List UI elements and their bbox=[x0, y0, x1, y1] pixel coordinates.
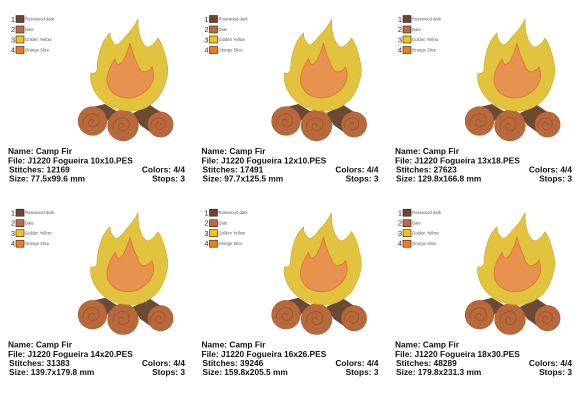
color legend 16x26: 1 bbox=[204, 209, 208, 218]
color legend 16x26: 4 bbox=[204, 239, 208, 248]
stitch details 13x18: Stitches: 27623 bbox=[396, 164, 457, 174]
stitch details 10x10 bbox=[8, 146, 185, 184]
color legend 18x30: Rosewood dark bbox=[412, 210, 442, 215]
stitch details 12x10: Name: Camp Fir bbox=[202, 146, 266, 156]
color legend 12x10: Orange Slice bbox=[218, 48, 243, 52]
stitch details 16x26: Name: Camp Fir bbox=[202, 340, 266, 350]
stitch details 10x10: File: J1220 Fogueira 10x10.PES bbox=[8, 155, 133, 165]
stitch details 14x20: Stops: 3 bbox=[152, 367, 185, 377]
color legend 13x18: Rosewood dark bbox=[412, 16, 442, 22]
stitch details 16x26: Stops: 3 bbox=[346, 367, 379, 377]
stitch details 18x30: Stitches: 48289 bbox=[396, 358, 457, 368]
stitch details 14x20: Name: Camp Fir bbox=[8, 340, 73, 350]
stitch details 14x20 bbox=[8, 340, 185, 377]
stitch details 18x30: Name: Camp Fir bbox=[395, 340, 460, 350]
color legend 10x10: 4 bbox=[11, 46, 15, 54]
color legend 18x30: 1 bbox=[398, 209, 402, 218]
color legend 14x20: 2 bbox=[11, 219, 15, 228]
color legend 18x30 bbox=[398, 209, 442, 248]
color legend 10x10: Orange Slice bbox=[25, 48, 50, 52]
stitch details 10x10: Size: 77.5x99.6 mm bbox=[9, 174, 85, 184]
stitch details 18x30 bbox=[395, 340, 572, 377]
stitch details 12x10 bbox=[202, 146, 379, 184]
color legend 14x20 bbox=[11, 209, 55, 248]
color legend 14x20: Rosewood dark bbox=[25, 210, 55, 215]
panel: 16x26 design bbox=[202, 209, 379, 377]
color legend 10x10: 2 bbox=[11, 25, 15, 34]
stitch details 14x20: Size: 139.7x179.8 mm bbox=[9, 367, 94, 377]
color legend 16x26: Orange Slice bbox=[218, 241, 243, 246]
stitch details 10x10: Stitches: 12169 bbox=[9, 164, 70, 174]
color legend 14x20: 1 bbox=[11, 209, 15, 218]
icon: campfire embroidery 10x10 bbox=[78, 19, 173, 141]
color legend 12x10: 1 bbox=[204, 15, 208, 24]
color legend 13x18: Orange Slice bbox=[412, 48, 437, 52]
color legend 18x30: Golden Yellow bbox=[412, 231, 440, 236]
color legend 18x30: Orange Slice bbox=[412, 241, 437, 246]
color legend 14x20: 3 bbox=[11, 229, 15, 238]
color legend 12x10: Rosewood dark bbox=[218, 16, 249, 22]
panel: 14x20 design bbox=[8, 209, 185, 377]
color legend 13x18: 2 bbox=[398, 25, 402, 34]
stitch details 13x18: Stops: 3 bbox=[539, 174, 572, 184]
color legend 16x26: Golden Yellow bbox=[218, 231, 246, 236]
stitch details 12x10: Stops: 3 bbox=[346, 174, 379, 184]
color legend 14x20: Date bbox=[25, 221, 35, 226]
color legend 10x10: Golden Yellow bbox=[25, 37, 53, 42]
color legend 12x10: 2 bbox=[204, 25, 208, 34]
stitch details 14x20: Stitches: 31383 bbox=[9, 358, 70, 368]
stitch details 10x10: Name: Camp Fir bbox=[8, 146, 73, 156]
color legend 13x18: 1 bbox=[398, 15, 402, 24]
stitch details 18x30: Colors: 4/4 bbox=[529, 358, 572, 368]
color legend 12x10: 4 bbox=[204, 46, 208, 54]
color legend 13x18: 3 bbox=[398, 36, 402, 44]
stitch details 13x18: File: J1220 Fogueira 13x18.PES bbox=[395, 155, 520, 165]
stitch details 13x18: Colors: 4/4 bbox=[529, 164, 572, 174]
stitch details 12x10: Colors: 4/4 bbox=[335, 164, 379, 174]
stitch details 14x20: File: J1220 Fogueira 14x20.PES bbox=[8, 349, 133, 359]
stitch details 12x10: File: J1220 Fogueira 12x10.PES bbox=[202, 155, 327, 165]
color legend 12x10: 3 bbox=[204, 36, 208, 44]
color legend 10x10: 3 bbox=[11, 36, 15, 44]
color legend 10x10 bbox=[11, 15, 55, 54]
stitch details 16x26 bbox=[202, 340, 379, 377]
color legend 18x30: 2 bbox=[398, 219, 402, 228]
icon: campfire embroidery 16x26 bbox=[272, 213, 367, 334]
stitch details 13x18: Size: 129.8x166.8 mm bbox=[396, 174, 481, 184]
stitch details 16x26: Size: 159.8x205.5 mm bbox=[202, 367, 288, 377]
color legend 14x20: Golden Yellow bbox=[25, 231, 53, 236]
color legend 10x10: 1 bbox=[11, 15, 15, 24]
stitch details 18x30: Stops: 3 bbox=[539, 367, 572, 377]
panel: 10x10 design bbox=[8, 15, 185, 184]
stitch details 16x26: File: J1220 Fogueira 16x26.PES bbox=[202, 349, 327, 359]
stitch details 12x10: Size: 97.7x125.5 mm bbox=[202, 174, 283, 184]
color legend 16x26 bbox=[204, 209, 249, 248]
color legend 13x18: Date bbox=[412, 27, 422, 32]
color legend 18x30: 3 bbox=[398, 229, 402, 238]
color legend 13x18: Golden Yellow bbox=[412, 37, 440, 42]
icon: campfire embroidery 13x18 bbox=[465, 19, 560, 141]
stitch details 18x30: File: J1220 Fogueira 18x30.PES bbox=[395, 349, 520, 359]
stitch details 10x10: Stops: 3 bbox=[152, 174, 185, 184]
stitch details 18x30: Size: 179.8x231.3 mm bbox=[396, 367, 481, 377]
stitch details 10x10: Colors: 4/4 bbox=[142, 164, 185, 174]
color legend 14x20: Orange Slice bbox=[25, 241, 50, 246]
color legend 12x10: Date bbox=[218, 27, 228, 32]
stitch details 16x26: Colors: 4/4 bbox=[335, 358, 379, 368]
color legend 10x10: Rosewood dark bbox=[25, 16, 55, 22]
stitch details 12x10: Stitches: 17491 bbox=[202, 164, 264, 174]
color legend 13x18: 4 bbox=[398, 46, 402, 54]
color legend 16x26: Date bbox=[218, 221, 228, 226]
color legend 12x10 bbox=[204, 15, 249, 54]
panel: 13x18 design bbox=[395, 15, 572, 184]
icon: campfire embroidery 18x30 bbox=[465, 213, 560, 334]
icon: campfire embroidery 12x10 bbox=[272, 19, 367, 141]
color legend 16x26: Rosewood dark bbox=[218, 210, 249, 215]
stitch details 13x18 bbox=[395, 146, 572, 184]
color legend 10x10: Date bbox=[25, 27, 35, 32]
color legend 18x30: Date bbox=[412, 221, 422, 226]
stitch details 14x20: Colors: 4/4 bbox=[142, 358, 185, 368]
color legend 14x20: 4 bbox=[11, 239, 15, 248]
panel: 18x30 design bbox=[395, 209, 572, 377]
stitch details 13x18: Name: Camp Fir bbox=[395, 146, 460, 156]
panel: 12x10 design bbox=[202, 15, 379, 184]
color legend 16x26: 2 bbox=[204, 219, 208, 228]
stitch details 16x26: Stitches: 39246 bbox=[202, 358, 264, 368]
icon: campfire embroidery 14x20 bbox=[78, 213, 173, 334]
color legend 13x18 bbox=[398, 15, 442, 54]
color legend 16x26: 3 bbox=[204, 229, 208, 238]
color legend 18x30: 4 bbox=[398, 239, 402, 248]
color legend 12x10: Golden Yellow bbox=[218, 37, 246, 42]
